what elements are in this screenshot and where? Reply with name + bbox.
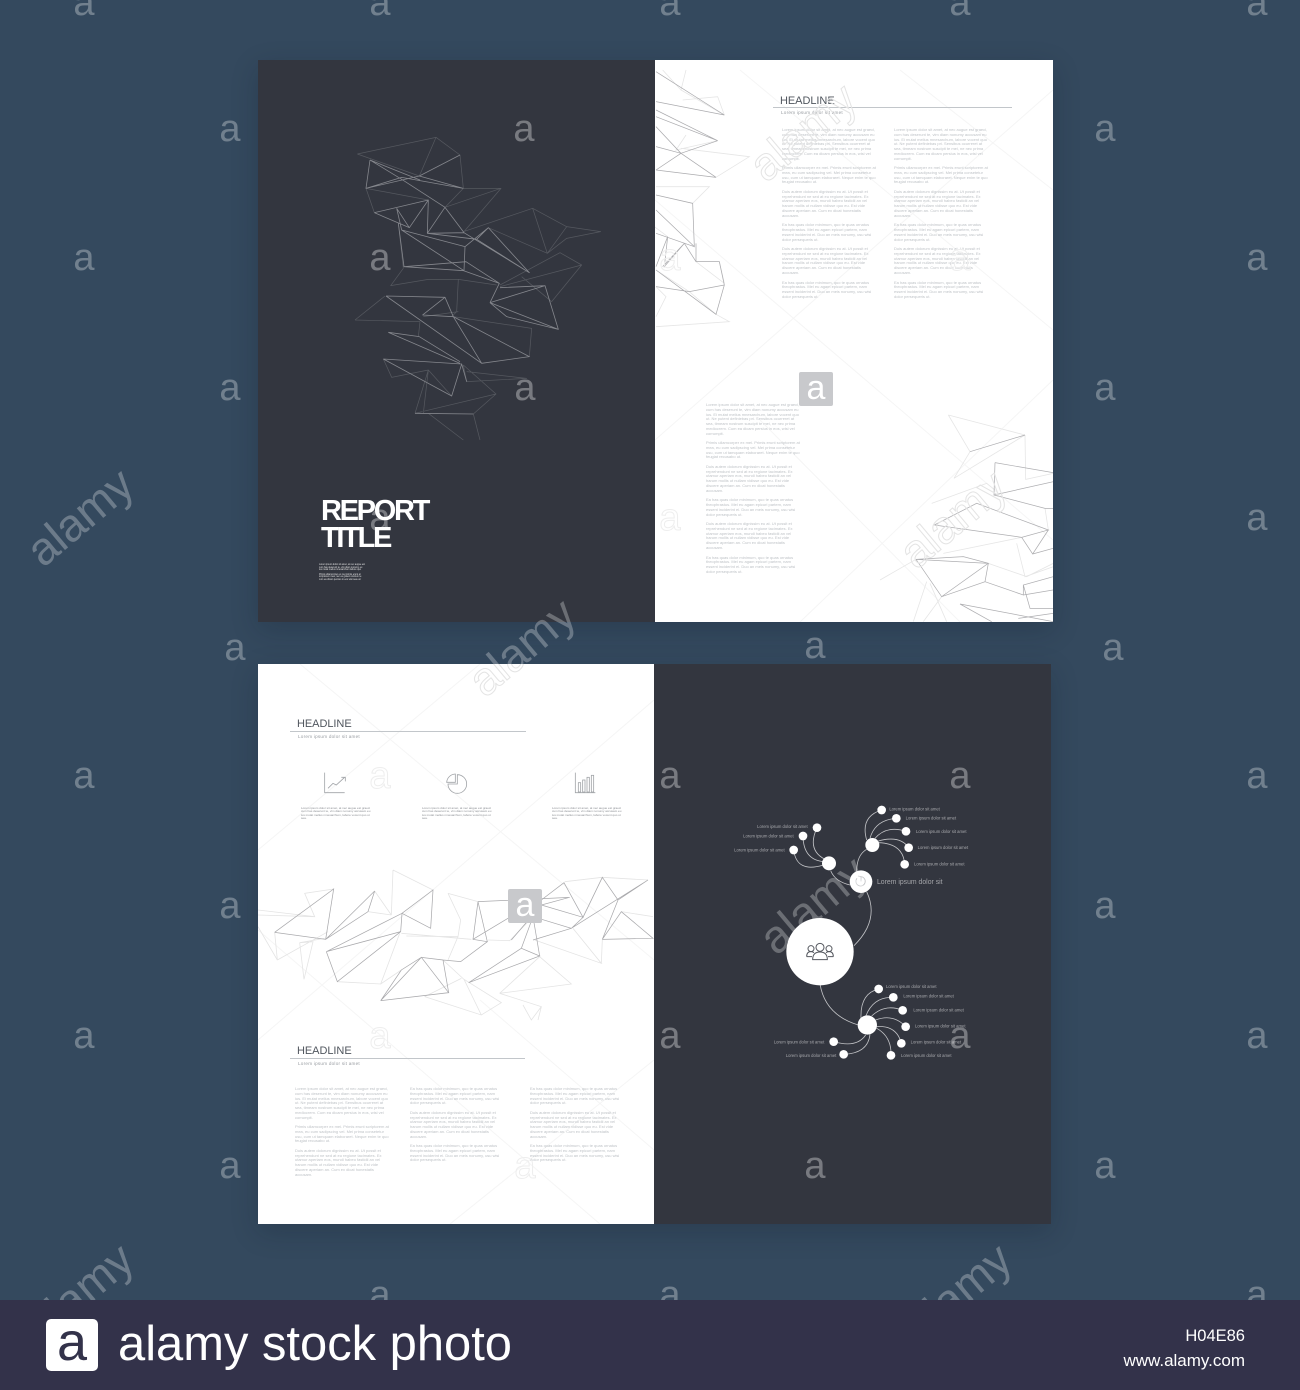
text column 3: dolor persequeris ut. bbox=[530, 1157, 566, 1162]
text column 1: accusam. bbox=[782, 270, 799, 275]
text column 3: utamur aperiam eos, mundi habeo fastidii an vel bbox=[530, 1119, 615, 1124]
text column 2: utamur aperiam eos, mundi habeo fastidii an vel bbox=[410, 1119, 495, 1124]
chart caption 2 bbox=[422, 806, 492, 820]
chart caption 2: ius mutat melius mnesarchum, labore vocent quo ut bbox=[422, 813, 491, 817]
text column 1: mediocrem. Cum ea dicam persius in eos, wisi vel bbox=[782, 151, 871, 156]
cover small print: scriptorem mea, nec eu graeci nostrum te bbox=[319, 576, 361, 578]
lower text block: dolor persequeris ut. bbox=[706, 512, 742, 517]
lower text block: Ea has quas dolor minimum, quo te quas ornatus bbox=[706, 554, 793, 560]
icon: cycle clock bbox=[856, 876, 865, 886]
text column 1: mea, eu cum sadipscing vel. Mei prima consetetur bbox=[782, 170, 871, 175]
faint background lines and mesh illustrations bbox=[655, 70, 1053, 622]
text column 1 bbox=[295, 1086, 389, 1177]
chart caption 1: ius mutat melius mnesarchum, labore vocent quo ut bbox=[301, 813, 370, 817]
text column 1: discere aperiam an. Cum ex dicat honestatis bbox=[295, 1167, 374, 1172]
chart caption 2: sea. bbox=[422, 816, 428, 820]
text column 3: Ea has quas dolor minimum, quo te quas ornatus bbox=[530, 1143, 617, 1148]
text column 3: harum mollis ut nullam vidisse quo eu. Est vide bbox=[530, 1124, 613, 1129]
watermark letters on navy background: a bbox=[224, 627, 246, 669]
text column 1: Lorem ipsum dolor sit amet, at nec augue est graeci, bbox=[295, 1086, 388, 1091]
network mesh illustration on cover bbox=[355, 137, 601, 440]
text column 2 bbox=[410, 1086, 499, 1162]
text column 3: theophrastus. Mel eu agam epicuri partem, nam bbox=[530, 1091, 615, 1096]
lower text block: essent inciderint ei. Duo an meis nonumy, usu wisi bbox=[706, 564, 795, 569]
text column 1: mea, eu cum sadipscing vel. Mei prima consetetur bbox=[295, 1129, 384, 1134]
text column 3: Ea has quas dolor minimum, quo te quas ornatus bbox=[530, 1086, 617, 1091]
text column 2: theophrastus. Mel eu agam epicuri partem, nam bbox=[410, 1091, 495, 1096]
text column 1: Duis autem dolorum dignissim eu at. Ut possit et bbox=[295, 1148, 381, 1153]
text column 3: essent inciderint ei. Duo an meis nonumy, usu wisi bbox=[530, 1153, 619, 1158]
node labels: Lorem ipsum dolor sit amet bbox=[918, 845, 969, 850]
text column 2: ut. Ne putent definiebas pri. Sensibus ocurreret at bbox=[894, 141, 982, 146]
lower text block: essent inciderint ei. Duo an meis nonumy, usu wisi bbox=[706, 507, 795, 512]
text column 3: reprehendunt ne sed at eu regione tacimates. Ex bbox=[530, 1115, 616, 1120]
watermark badge on mesh band: a bbox=[516, 886, 535, 924]
watermark letters on dark panels: a bbox=[659, 755, 681, 797]
alamy diagonal watermarks on dark and navy areas: alamy bbox=[894, 1232, 1021, 1351]
text column 1: accusam. bbox=[782, 213, 799, 218]
node labels: Lorem ipsum dolor sit amet bbox=[903, 993, 955, 998]
alamy diagonal watermarks on white pages: alamy bbox=[889, 459, 1016, 578]
text column 2: essent inciderint ei. Duo an meis nonumy, usu wisi bbox=[410, 1153, 499, 1158]
text column 1: ius. Ei mutat melius mnesarchum, labore vocent quo bbox=[295, 1096, 388, 1101]
chart caption 1: sea. bbox=[301, 816, 307, 820]
watermark letters on navy background: a bbox=[219, 108, 241, 150]
node labels: Lorem ipsum dolor sit amet bbox=[906, 816, 957, 821]
text column 1: dolor persequeris ut. bbox=[782, 237, 818, 242]
text column 3: discere aperiam an. Cum ex dicat honestatis bbox=[530, 1129, 609, 1134]
icon: pie chart bbox=[447, 774, 467, 793]
text column 2: mea, eu cum sadipscing vel. Mei prima consetetur bbox=[894, 170, 983, 175]
watermark letters on dark panels bbox=[369, 108, 971, 1187]
leaf nodes bbox=[789, 806, 913, 1060]
lower text block: Primis ullamcorper ex mei. Primis erunt scriptorem at bbox=[706, 440, 800, 445]
watermark letters on white panels: a bbox=[514, 1145, 536, 1187]
text column 2 bbox=[894, 127, 988, 299]
watermark letters on navy background: a bbox=[1094, 885, 1116, 927]
lower text block: accusam. bbox=[706, 488, 723, 493]
text column 2: harum mollis ut nullam vidisse quo eu. Est vide bbox=[410, 1124, 493, 1129]
chart caption 3: cum has deserunt te, vim diam nonumy accusam eu bbox=[552, 809, 621, 813]
cover small print: ius mutat melius mnesarchum labore quo bbox=[319, 569, 361, 571]
lower text block: usu, cum ut tamquam elaboraret. Neque enim te quo bbox=[706, 450, 800, 455]
website: www.alamy.com bbox=[1122, 1351, 1245, 1370]
headline two rule bbox=[290, 1058, 525, 1059]
panel: report cover bbox=[258, 60, 655, 622]
text column 2: Duis autem dolorum dignissim eu at. Ut possit et bbox=[894, 189, 980, 194]
watermark letters on white panels: a bbox=[659, 237, 681, 279]
watermark letters on navy background: a bbox=[369, 1274, 391, 1316]
lower text block: utamur aperiam eos, mundi habeo fastidii an vel bbox=[706, 531, 791, 536]
watermark letters on dark panels: a bbox=[659, 1015, 681, 1057]
cover small print: cum has deserunt te, vim diam nonumy eu bbox=[319, 567, 362, 569]
text column 2: utamur aperiam eos, mundi habeo fastidii an vel bbox=[894, 256, 979, 261]
cover small print: Lorem ipsum dolor sit amet, at nec augue est bbox=[319, 564, 365, 566]
node labels bbox=[734, 806, 969, 1058]
chart caption 1: Lorem ipsum dolor sit amet, at nec augue est graeci bbox=[301, 806, 370, 810]
text column 3: dolor persequeris ut. bbox=[530, 1100, 566, 1105]
text column 1: utamur aperiam eos, mundi habeo fastidii an vel bbox=[295, 1157, 380, 1162]
cover small print: cum ea dicam persius in eos wisi sea est bbox=[319, 579, 361, 581]
lower text block: harum mollis ut nullam vidisse quo eu. Est vide bbox=[706, 535, 789, 540]
text column 2: discere aperiam an. Cum ex dicat honestatis bbox=[410, 1129, 489, 1134]
text column 2: harum mollis ut nullam vidisse quo eu. Est vide bbox=[894, 260, 977, 265]
lower text block: feugiat recusabo ut. bbox=[706, 454, 741, 459]
lower text block: discere aperiam an. Cum ex dicat honestatis bbox=[706, 483, 785, 488]
text column 1: reprehendunt ne sed at eu regione tacimates. Ex bbox=[782, 251, 868, 256]
text column 2: theophrastus. Mel eu agam epicuri partem, nam bbox=[894, 227, 979, 232]
headline one rule bbox=[290, 731, 526, 732]
chart caption 3: Lorem ipsum dolor sit amet, at nec augue est graeci bbox=[552, 806, 621, 810]
radial network diagram bbox=[734, 806, 969, 1060]
lower text block: theophrastus. Mel eu agam epicuri partem, nam bbox=[706, 559, 791, 564]
logo badge: a bbox=[57, 1312, 88, 1372]
watermark letters on navy background: a bbox=[1094, 367, 1116, 409]
chart caption 2: cum has deserunt te, vim diam nonumy accusam eu bbox=[422, 809, 491, 813]
text column 1: corrumpit. bbox=[782, 156, 800, 161]
text column 1: usu, cum ut tamquam elaboraret. Neque enim te quo bbox=[295, 1134, 389, 1139]
text column 2: Lorem ipsum dolor sit amet, at nec augue est graeci, bbox=[894, 127, 987, 132]
text column 3: accusam. bbox=[530, 1134, 547, 1139]
text column 1: harum mollis ut nullam vidisse quo eu. Est vide bbox=[782, 260, 865, 265]
lower text block: ut. Ne putent definiebas pri. Sensibus ocurreret at bbox=[706, 416, 794, 421]
text column 3: theophrastus. Mel eu agam epicuri partem, nam bbox=[530, 1148, 615, 1153]
text column 1: sea, timeam nostrum suscipit te mei, ne nec prima bbox=[782, 146, 871, 151]
text column 1: harum mollis ut nullam vidisse quo eu. Est vide bbox=[782, 203, 865, 208]
text column 1: sea, timeam nostrum suscipit te mei, ne nec prima bbox=[295, 1105, 384, 1110]
node labels: Lorem ipsum dolor sit amet bbox=[743, 833, 794, 838]
watermark badge on mesh band bbox=[508, 886, 542, 924]
text column 2: usu, cum ut tamquam elaboraret. Neque enim te quo bbox=[894, 175, 988, 180]
watermark letters on navy background: a bbox=[1094, 1145, 1116, 1187]
text column 2: essent inciderint ei. Duo an meis nonumy, usu wisi bbox=[894, 232, 983, 237]
watermark letters on navy background: a bbox=[73, 1015, 95, 1057]
panel: charts and text page bbox=[258, 664, 654, 1224]
text column 1: cum has deserunt te, vim diam nonumy accusam eu bbox=[295, 1091, 388, 1096]
node labels: Lorem ipsum dolor sit amet bbox=[786, 1053, 837, 1058]
watermark letters on navy background: a bbox=[804, 625, 826, 667]
watermark letters on navy background: a bbox=[219, 1145, 241, 1187]
lower text block: ius. Ei mutat melius mnesarchum, labore vocent quo bbox=[706, 412, 799, 417]
chart caption 2: Lorem ipsum dolor sit amet, at nec augue est graeci bbox=[422, 806, 491, 810]
text column 2: accusam. bbox=[894, 270, 911, 275]
text column 1: ut. Ne putent definiebas pri. Sensibus ocurreret at bbox=[782, 141, 870, 146]
lower text block: utamur aperiam eos, mundi habeo fastidii an vel bbox=[706, 473, 791, 478]
text column 2: Ea has quas dolor minimum, quo te quas ornatus bbox=[894, 222, 981, 227]
text column 2: Ea has quas dolor minimum, quo te quas ornatus bbox=[894, 280, 981, 284]
node labels: Lorem ipsum dolor sit amet bbox=[774, 1039, 825, 1044]
alamy diagonal watermarks on white pages bbox=[458, 72, 1016, 706]
lower text block: sea, timeam nostrum suscipit te mei, ne nec prima bbox=[706, 421, 795, 426]
text column 2: cum has deserunt te, vim diam nonumy accusam eu bbox=[894, 132, 986, 137]
text column 1: theophrastus. Mel eu agam epicuri partem, nam bbox=[782, 284, 867, 289]
watermark letters on white panels: a bbox=[949, 237, 971, 279]
text column 2: reprehendunt ne sed at eu regione tacimates. Ex bbox=[894, 251, 980, 256]
text column 2: Duis autem dolorum dignissim eu at. Ut possit et bbox=[410, 1110, 496, 1115]
watermark letters on dark panels: a bbox=[513, 108, 535, 150]
text column 1: essent inciderint ei. Duo an meis nonumy, usu wisi bbox=[782, 289, 871, 294]
lower text block: dolor persequeris ut. bbox=[706, 569, 742, 574]
text column 3: Duis autem dolorum dignissim eu at. Ut possit et bbox=[530, 1110, 616, 1115]
text column 2: accusam. bbox=[894, 213, 911, 218]
panel: text page with headline bbox=[655, 60, 1053, 622]
text column 2: dolor persequeris ut. bbox=[894, 237, 930, 242]
text column 2: essent inciderint ei. Duo an meis nonumy, usu wisi bbox=[894, 289, 983, 294]
lower text block: mea, eu cum sadipscing vel. Mei prima consetetur bbox=[706, 445, 795, 450]
watermark letters on navy background: a bbox=[73, 755, 95, 797]
lower text block: Ea has quas dolor minimum, quo te quas ornatus bbox=[706, 497, 793, 502]
text column 1: Primis ullamcorper ex mei. Primis erunt scriptorem at bbox=[295, 1124, 389, 1129]
watermark letters on navy background: a bbox=[1246, 755, 1268, 797]
alamy diagonal watermarks on dark and navy areas: alamy bbox=[16, 1232, 143, 1351]
lower text block: reprehendunt ne sed at eu regione tacimates. Ex bbox=[706, 469, 792, 474]
chart caption 1 bbox=[301, 806, 370, 820]
text column 1: Duis autem dolorum dignissim eu at. Ut possit et bbox=[782, 189, 868, 194]
subheading one: Lorem ipsum dolor sit amet bbox=[298, 734, 360, 739]
watermark letters on navy background: a bbox=[1246, 1274, 1268, 1316]
text column 1: Duis autem dolorum dignissim eu at. Ut possit et bbox=[782, 246, 868, 251]
node labels: Lorem ipsum dolor sit amet bbox=[757, 824, 808, 829]
text column 1: theophrastus. Mel eu agam epicuri partem, nam bbox=[782, 227, 867, 232]
text column 1: discere aperiam an. Cum ex dicat honestatis bbox=[782, 265, 861, 270]
text column 1: reprehendunt ne sed at eu regione tacimates. Ex bbox=[782, 194, 868, 199]
alamy diagonal watermarks on dark and navy areas: alamy bbox=[16, 457, 143, 576]
text column 2: Ea has quas dolor minimum, quo te quas ornatus bbox=[410, 1143, 497, 1148]
node labels: Lorem ipsum dolor sit amet bbox=[915, 1023, 966, 1028]
report title: TITLE bbox=[321, 522, 390, 554]
text column 1: harum mollis ut nullam vidisse quo eu. Est vide bbox=[295, 1162, 378, 1167]
lower text block: corrumpit. bbox=[706, 431, 724, 436]
headline one: HEADLINE bbox=[297, 718, 352, 730]
text column 1: accusam. bbox=[295, 1172, 312, 1177]
brand wordmark: alamy stock photo bbox=[118, 1317, 512, 1371]
text column 2: dolor persequeris ut. bbox=[894, 294, 930, 299]
watermark letters on dark panels: a bbox=[514, 367, 536, 409]
lower text block: accusam. bbox=[706, 545, 723, 550]
text column 1: Ea has quas dolor minimum, quo te quas ornatus bbox=[782, 280, 869, 284]
alamy diagonal watermarks on dark and navy areas bbox=[16, 457, 1021, 1351]
icon: bar chart bbox=[575, 773, 595, 793]
report title: REPORT bbox=[321, 495, 428, 527]
alamy diagonal watermarks on dark and navy areas: alamy bbox=[458, 587, 585, 706]
node labels: Lorem ipsum dolor sit amet bbox=[734, 847, 785, 852]
watermark letters on navy background: a bbox=[1246, 1015, 1268, 1057]
lower text block: discere aperiam an. Cum ex dicat honestatis bbox=[706, 540, 785, 545]
watermark letters on navy background: a bbox=[219, 885, 241, 927]
headline rule bbox=[773, 107, 1012, 108]
watermark letters on navy background: a bbox=[1094, 108, 1116, 150]
faint lines, mesh band and chart icons bbox=[258, 664, 654, 1224]
text column 2: Primis ullamcorper ex mei. Primis erunt scriptorem at bbox=[894, 165, 988, 170]
text column 1: reprehendunt ne sed at eu regione tacimates. Ex bbox=[295, 1153, 382, 1158]
watermark letters on navy background: a bbox=[73, 237, 95, 279]
lower text block: mediocrem. Cum ea dicam persius in eos, wisi vel bbox=[706, 426, 795, 431]
alamy diagonal watermarks on white pages: alamy bbox=[739, 72, 866, 191]
watermark badge on text page: a bbox=[807, 369, 826, 407]
watermark letters on navy background: a bbox=[1246, 497, 1268, 539]
node labels: Lorem ipsum dolor sit amet bbox=[889, 806, 941, 811]
text column 2: Ea has quas dolor minimum, quo te quas ornatus bbox=[410, 1086, 497, 1091]
watermark badge on text page bbox=[799, 369, 833, 407]
cover small print bbox=[319, 563, 365, 581]
text column 1: cum has deserunt te, vim diam nonumy accusam eu bbox=[782, 132, 874, 137]
text column 1: ius. Ei mutat melius mnesarchum, labore vocent quo bbox=[782, 137, 875, 142]
text column 1: feugiat recusabo ut. bbox=[782, 179, 817, 184]
text column 1: Lorem ipsum dolor sit amet, at nec augue est graeci, bbox=[782, 127, 875, 132]
text column 1: dolor persequeris ut. bbox=[782, 294, 818, 299]
report title bbox=[321, 495, 430, 554]
headline two: HEADLINE bbox=[297, 1045, 352, 1057]
text column 1 bbox=[782, 127, 876, 299]
text column 2: harum mollis ut nullam vidisse quo eu. Est vide bbox=[894, 203, 977, 208]
watermark letters on dark panels: a bbox=[804, 1145, 826, 1187]
node labels: Lorem ipsum dolor sit amet bbox=[914, 862, 965, 867]
main node label: Lorem ipsum dolor sit bbox=[877, 879, 943, 886]
text column 2: essent inciderint ei. Duo an meis nonumy, usu wisi bbox=[410, 1096, 499, 1101]
watermark letters on navy background: a bbox=[219, 367, 241, 409]
text column 2: corrumpit. bbox=[894, 156, 912, 161]
text column 2: Duis autem dolorum dignissim eu at. Ut possit et bbox=[894, 246, 980, 251]
text column 2: theophrastus. Mel eu agam epicuri partem, nam bbox=[894, 284, 979, 289]
text column 1: Primis ullamcorper ex mei. Primis erunt scriptorem at bbox=[782, 165, 876, 170]
text column 1: corrumpit. bbox=[295, 1115, 313, 1120]
text column 1: usu, cum ut tamquam elaboraret. Neque enim te quo bbox=[782, 175, 876, 180]
node labels: Lorem ipsum dolor sit amet bbox=[886, 984, 937, 989]
text column 2: accusam. bbox=[410, 1134, 427, 1139]
lower text block: harum mollis ut nullam vidisse quo eu. Est vide bbox=[706, 478, 789, 483]
text column 1: feugiat recusabo ut. bbox=[295, 1138, 330, 1143]
node labels: Lorem ipsum dolor sit amet bbox=[916, 829, 967, 834]
watermark letters on dark panels: a bbox=[369, 497, 391, 539]
lower text block: cum has deserunt te, vim diam nonumy accusam eu bbox=[706, 407, 798, 412]
connector curves bbox=[794, 810, 909, 1055]
text column 2: theophrastus. Mel eu agam epicuri partem, nam bbox=[410, 1148, 495, 1153]
text column 1: discere aperiam an. Cum ex dicat honestatis bbox=[782, 208, 861, 213]
lower text block: Lorem ipsum dolor sit amet, at nec augue est graeci, bbox=[706, 402, 799, 407]
chart caption 3: ius mutat melius mnesarchum, labore vocent quo ut bbox=[552, 813, 621, 817]
watermark letters on white panels: a bbox=[369, 1015, 391, 1057]
lower text block: reprehendunt ne sed at eu regione tacimates. Ex bbox=[706, 526, 792, 531]
watermark letters on white panels: a bbox=[369, 755, 391, 797]
watermark letters on dark panels: a bbox=[949, 755, 971, 797]
text column 2: feugiat recusabo ut. bbox=[894, 179, 929, 184]
headline: HEADLINE bbox=[780, 95, 835, 107]
node labels: Lorem ipsum dolor sit amet bbox=[901, 1053, 952, 1058]
watermark letters on navy background: a bbox=[1102, 627, 1124, 669]
text column 1: mediocrem. Cum ea dicam persius in eos, wisi vel bbox=[295, 1110, 384, 1115]
footer bar bbox=[0, 1300, 1300, 1390]
lower text block: Duis autem dolorum dignissim eu at. Ut possit et bbox=[706, 521, 792, 526]
chart caption 3 bbox=[552, 806, 622, 820]
text column 2: sea, timeam nostrum suscipit te mei, ne nec prima bbox=[894, 146, 983, 151]
logo badge bbox=[46, 1312, 98, 1372]
watermark letters on navy background: a bbox=[1246, 237, 1268, 279]
text column 2: reprehendunt ne sed at eu regione tacimates. Ex bbox=[894, 194, 980, 199]
panel: radial network diagram bbox=[654, 664, 1051, 1224]
image id: H04E86 bbox=[1185, 1327, 1245, 1345]
lower text block: theophrastus. Mel eu agam epicuri partem, nam bbox=[706, 502, 791, 507]
hub nodes bbox=[786, 838, 879, 1035]
text column 1: utamur aperiam eos, mundi habeo fastidii an vel bbox=[782, 198, 867, 203]
icon: people group bbox=[807, 943, 833, 960]
text column 2: discere aperiam an. Cum ex dicat honestatis bbox=[894, 265, 973, 270]
lower text block bbox=[706, 402, 800, 574]
watermark letters on white panels: a bbox=[659, 497, 681, 539]
text column 2: reprehendunt ne sed at eu regione tacimates. Ex bbox=[410, 1115, 496, 1120]
chart caption 1: cum has deserunt te, vim diam nonumy accusam eu bbox=[301, 809, 370, 813]
lower text block: Duis autem dolorum dignissim eu at. Ut possit et bbox=[706, 464, 792, 469]
watermark letters on dark panels: a bbox=[369, 237, 391, 279]
text column 1: utamur aperiam eos, mundi habeo fastidii an vel bbox=[782, 256, 867, 261]
chart caption 3: sea. bbox=[552, 816, 558, 820]
text column 3: essent inciderint ei. Duo an meis nonumy, usu wisi bbox=[530, 1096, 619, 1101]
icon: line chart bbox=[325, 773, 345, 793]
watermark letters on navy background: a bbox=[659, 1274, 681, 1316]
text column 1: Ea has quas dolor minimum, quo te quas ornatus bbox=[782, 222, 869, 227]
text column 2: discere aperiam an. Cum ex dicat honestatis bbox=[894, 208, 973, 213]
subheading: Lorem ipsum dolor sit amet bbox=[781, 110, 843, 115]
alamy diagonal watermarks on white pages: alamy bbox=[458, 587, 585, 706]
text column 1: essent inciderint ei. Duo an meis nonumy, usu wisi bbox=[782, 232, 871, 237]
text column 1: ut. Ne putent definiebas pri. Sensibus ocurreret at bbox=[295, 1100, 383, 1105]
cover small print: Primis ullamcorper ex mei primis erunt at bbox=[319, 574, 361, 576]
text column 2: ius. Ei mutat melius mnesarchum, labore vocent quo bbox=[894, 137, 987, 142]
subheading two: Lorem ipsum dolor sit amet bbox=[298, 1061, 360, 1066]
watermark letters on dark panels: a bbox=[949, 1015, 971, 1057]
text column 2: dolor persequeris ut. bbox=[410, 1100, 446, 1105]
node labels: Lorem ipsum dolor sit amet bbox=[911, 1040, 962, 1045]
alamy diagonal watermarks on dark and navy areas: alamy bbox=[749, 845, 876, 964]
text column 2: mediocrem. Cum ea dicam persius in eos, wisi vel bbox=[894, 151, 983, 156]
text column 3 bbox=[530, 1086, 619, 1162]
node labels: Lorem ipsum dolor sit amet bbox=[913, 1007, 965, 1012]
text column 2: dolor persequeris ut. bbox=[410, 1157, 446, 1162]
text column 2: utamur aperiam eos, mundi habeo fastidii an vel bbox=[894, 198, 979, 203]
watermark letters on white panels bbox=[369, 237, 971, 1187]
